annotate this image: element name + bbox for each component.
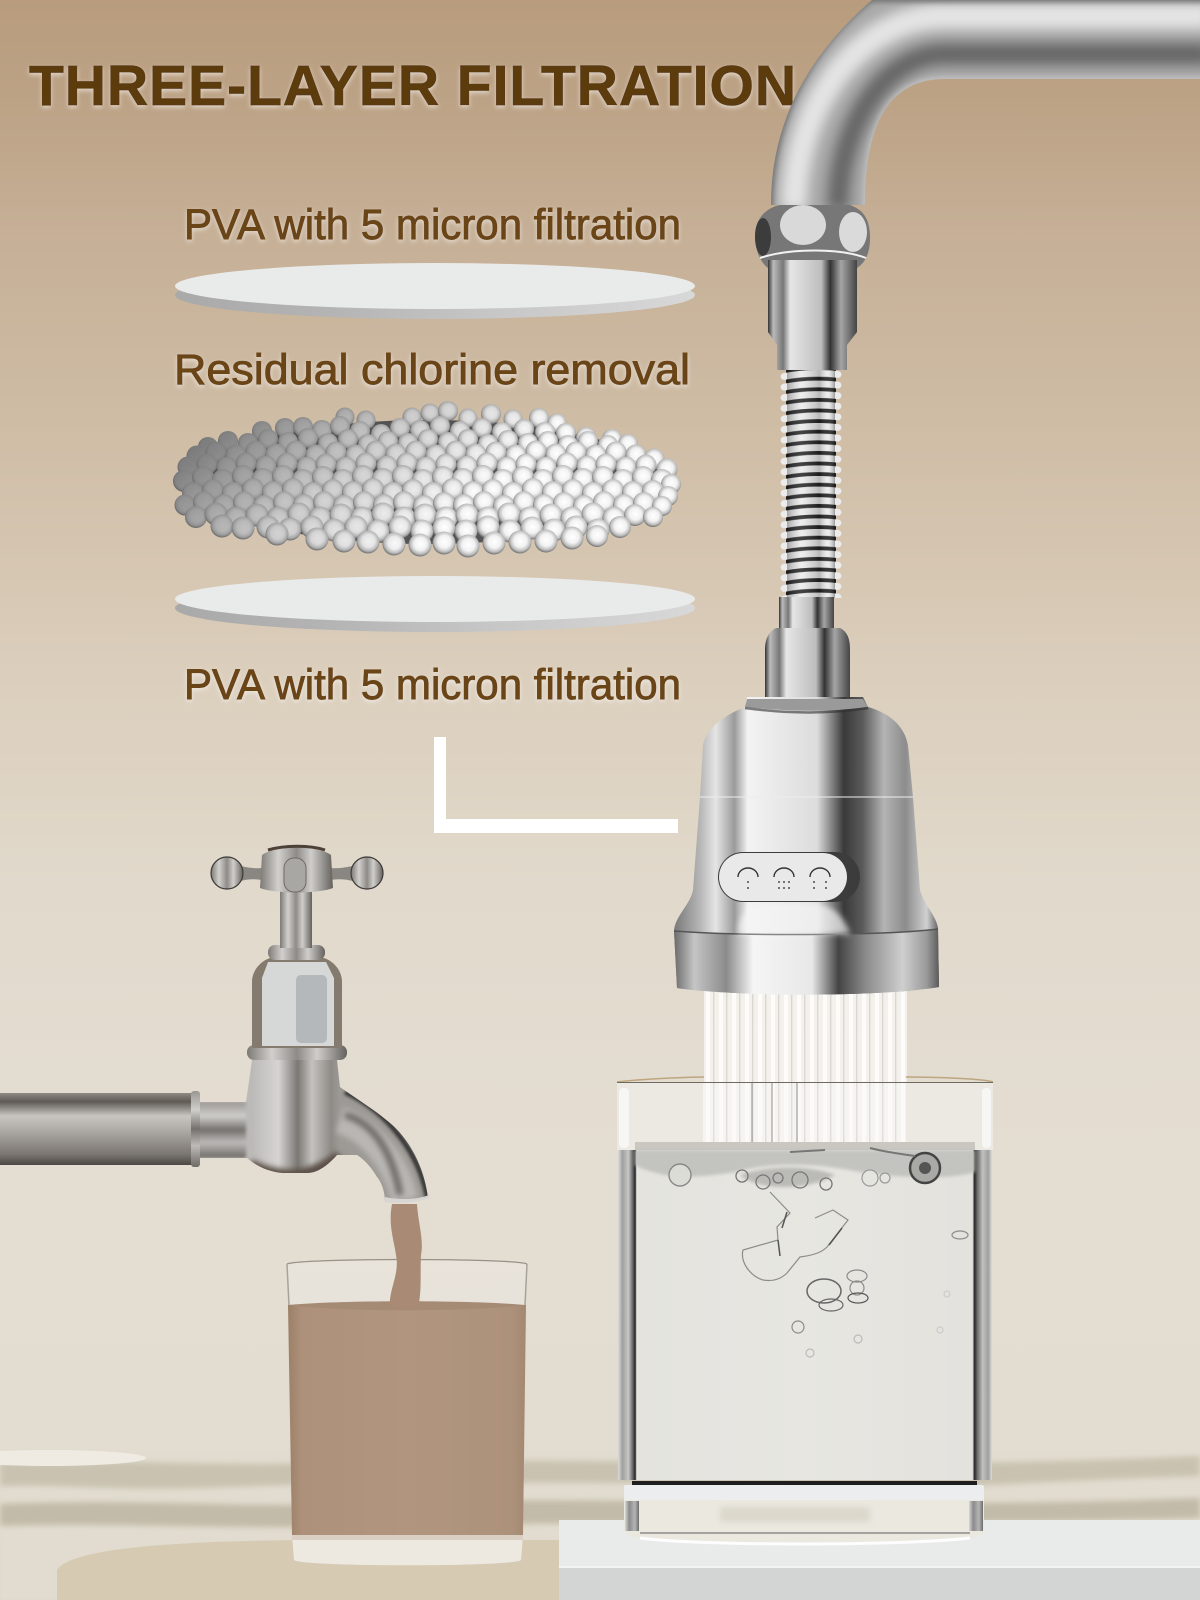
tap supply pipe	[0, 1093, 193, 1165]
underwater bubbles and plume	[742, 1192, 968, 1357]
tap upper ring	[268, 945, 325, 960]
bottom PVA filter disc	[175, 576, 695, 632]
tap stem	[280, 890, 312, 948]
flexible hose assembly	[755, 205, 870, 700]
tap spout	[196, 1060, 429, 1203]
round beige platform	[57, 1540, 560, 1600]
hose coil	[780, 368, 842, 598]
lower collars	[779, 597, 834, 629]
old tap	[0, 846, 429, 1203]
hex nut	[755, 205, 870, 268]
label: chlorine layer: Residual chlorine removal	[174, 346, 690, 394]
label: top PVA layer: PVA with 5 micron filtration	[184, 201, 681, 249]
chrome faucet pipe	[768, 0, 1200, 210]
tap lower ring	[247, 1045, 347, 1060]
small glass with muddy water	[287, 1204, 527, 1565]
top PVA filter disc	[175, 263, 695, 319]
tap cross handle	[211, 846, 383, 892]
head skirt	[674, 929, 939, 995]
tap hex body	[252, 958, 342, 1048]
upper collar	[768, 260, 857, 332]
bead shading	[173, 401, 542, 550]
white platform	[559, 1520, 1200, 1600]
surface band	[635, 1142, 975, 1150]
rippled counter surface	[0, 1450, 1200, 1528]
pipe collar	[191, 1091, 200, 1167]
shower head	[674, 697, 939, 995]
small glass base	[292, 1535, 523, 1565]
muddy water	[288, 1305, 526, 1535]
clear water	[618, 1150, 992, 1480]
clear glass with filtered water	[617, 1077, 993, 1546]
muddy stream	[390, 1204, 422, 1308]
head body	[674, 697, 939, 995]
glass upper wall	[617, 1082, 993, 1150]
bead pile	[173, 401, 681, 558]
bubble line at surface	[635, 1148, 975, 1190]
label: bottom PVA layer: PVA with 5 micron filtration	[184, 661, 681, 709]
title: THREE-LAYER FILTRATION	[29, 54, 796, 118]
mode button	[718, 852, 860, 902]
white bracket connector	[434, 737, 678, 833]
glass base	[624, 1500, 984, 1546]
dark base line	[632, 1481, 977, 1485]
water streams	[704, 990, 907, 1082]
chlorine removal beads	[173, 401, 681, 558]
